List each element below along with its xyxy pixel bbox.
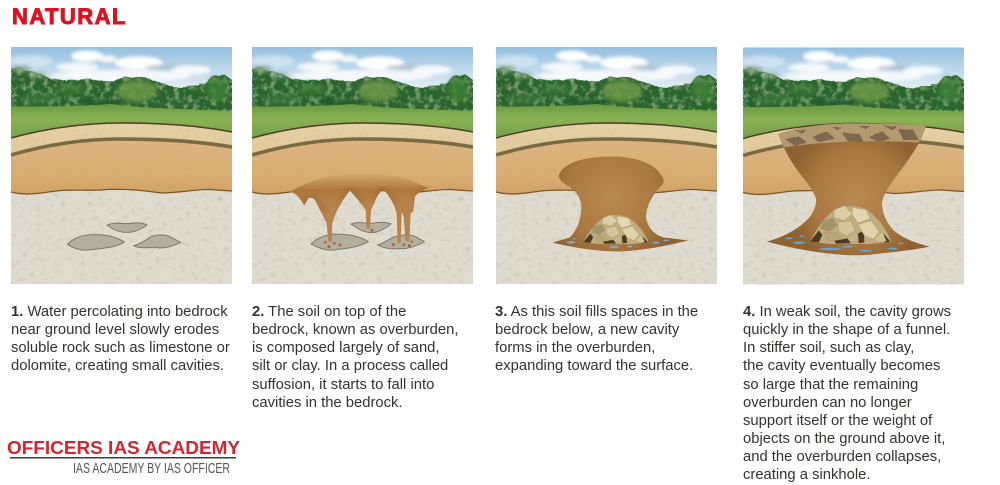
landscape cross-section [494, 47, 717, 284]
text block: step 2: is composed largely of sand, [252, 340, 440, 356]
text block: step 4: creating a sinkhole. [743, 467, 870, 483]
text block: step 3: 3. As this soil fills spaces in the [495, 304, 698, 320]
text block: step 2: bedrock, known as overburden, [252, 322, 458, 338]
text block: step 1 [11, 304, 230, 374]
panel: step 1 illustration [11, 47, 232, 284]
rock pile [583, 215, 649, 244]
landscape cross-section [9, 47, 232, 284]
panel: step 4 illustration [743, 48, 964, 284]
text block: step 4: objects on the ground above it, [743, 431, 945, 447]
landscape cross-section [741, 48, 964, 284]
text block: step 2: silt or clay. In a process called [252, 358, 448, 374]
text block: step 1: soluble rock such as limestone or [11, 340, 230, 356]
text block: step 2: cavities in the bedrock. [252, 395, 403, 411]
logo: Officers IAS Academy: OFFICERS IAS ACADEMY [7, 438, 240, 458]
text block: step 1: near ground level slowly erodes [11, 322, 219, 338]
text block: step 4 [743, 304, 951, 483]
soil drips [290, 173, 428, 243]
text block: step 3: expanding toward the surface. [495, 358, 693, 374]
scene with bedrock cavities [11, 47, 232, 284]
text block: step 2: 2. The soil on top of the [252, 304, 406, 320]
title: NATURAL [12, 4, 127, 29]
text block: step 4: so large that the remaining [743, 377, 918, 393]
rock pile [810, 206, 891, 244]
text block: step 4: overburden can no longer [743, 395, 912, 411]
small cavities [67, 223, 181, 250]
text block: step 4: and the overburden collapses, [743, 449, 941, 465]
text block: step 3: forms in the overburden, [495, 340, 655, 356]
text block: step 2: suffosion, it starts to fall into [252, 377, 434, 393]
funnel cavity, rubble and water [767, 123, 930, 255]
logo: Officers IAS Academy [7, 438, 240, 477]
text block: step 3: bedrock below, a new cavity [495, 322, 679, 338]
panel: step 2 illustration [252, 47, 473, 284]
cavities and overburden drips [290, 173, 428, 250]
text block: step 1: dolomite, creating small cavities. [11, 358, 224, 374]
panel: step 3 illustration [496, 47, 717, 284]
text block: step 4: 4. In weak soil, the cavity grows [743, 304, 951, 320]
text block: step 2 [252, 304, 458, 411]
scene with soil dripping into cavities [252, 47, 473, 284]
scene with funnel-shaped collapse [743, 48, 964, 284]
text block: step 1: 1. Water percolating into bedrock [11, 304, 228, 320]
text block: step 4: quickly in the shape of a funnel. [743, 322, 950, 338]
text block: step 4: support itself or the weight of [743, 413, 932, 429]
scene with new cavity in overburden [496, 47, 717, 284]
text block: step 3 [495, 304, 698, 374]
landscape cross-section [250, 47, 473, 284]
text block: step 4: In stiffer soil, such as clay, [743, 340, 914, 356]
text block: step 4: the cavity eventually becomes [743, 358, 940, 374]
cavity, rubble and water [553, 157, 688, 251]
